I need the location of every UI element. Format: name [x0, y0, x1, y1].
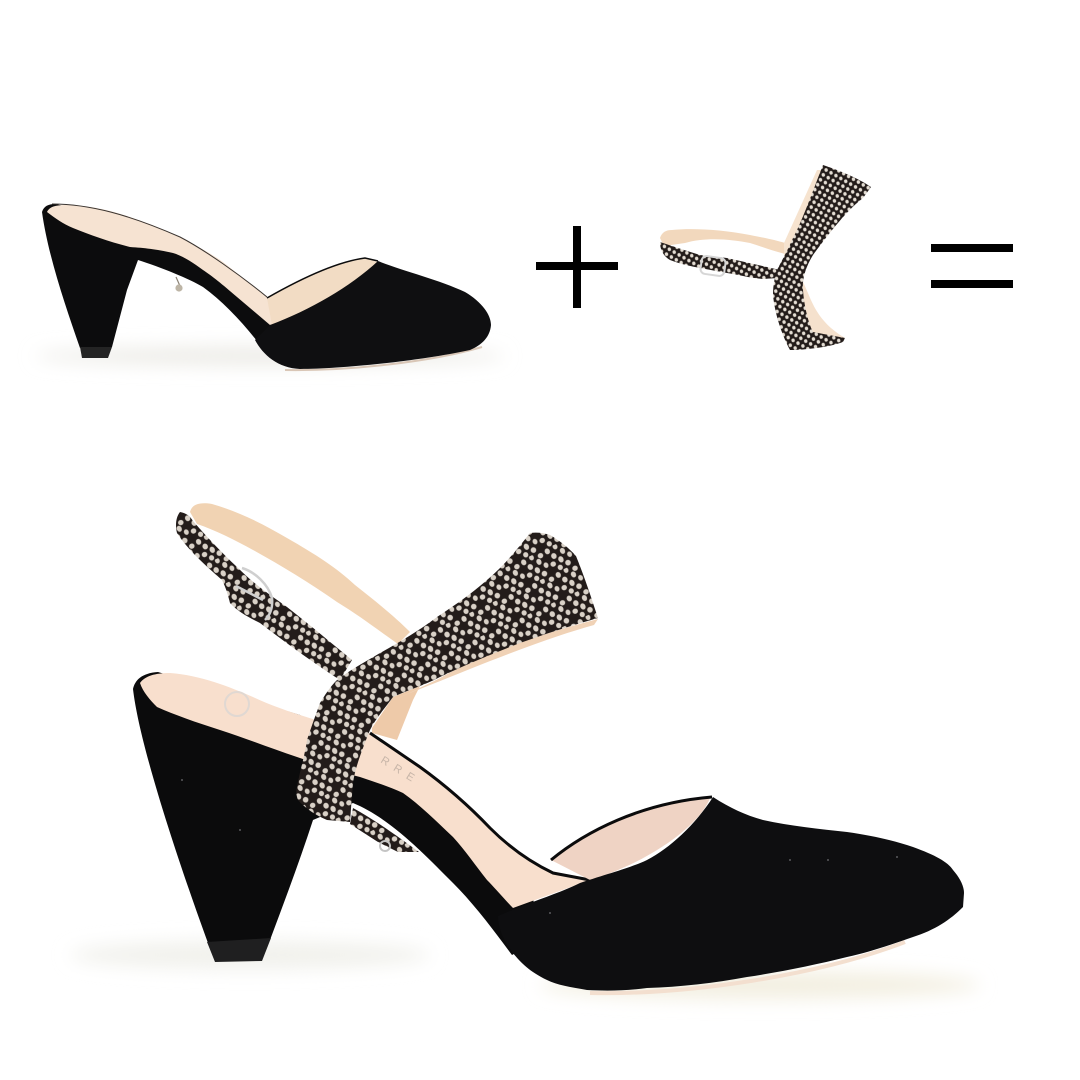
charm: [380, 841, 390, 851]
interior toe opening: [551, 798, 710, 880]
lining under front strap: [372, 686, 420, 740]
ground shadow: [70, 941, 430, 969]
sole: [590, 942, 905, 993]
band lining: [784, 170, 824, 256]
toe shadow: [540, 971, 980, 999]
top mule shoe: [35, 204, 505, 370]
heel and back band: [133, 672, 540, 955]
back speckled strap: [176, 512, 352, 680]
insole logo: [225, 692, 249, 716]
front speckled band: [773, 165, 871, 350]
assembled slingback shoe: [70, 503, 980, 999]
insole brand text: RRE: [378, 754, 422, 788]
heel tip: [207, 938, 271, 962]
ground shadow under mule: [35, 347, 505, 365]
vamp: [498, 797, 964, 991]
suede specks: [181, 779, 898, 914]
mule sole: [285, 347, 482, 370]
front strap lining edge: [393, 619, 598, 700]
buckle: [236, 568, 272, 620]
upper inner topline: [370, 733, 590, 880]
equals sign: [931, 244, 1013, 288]
speckled strip under strap: [350, 808, 419, 852]
mule heel and band: [42, 204, 280, 350]
front speckled strap: [296, 533, 598, 822]
mule interior: [267, 258, 378, 325]
back ankle strap speckled: [660, 242, 780, 279]
back strap lining: [190, 503, 410, 644]
mule top rim line: [52, 204, 267, 297]
plus sign: [536, 226, 618, 308]
insole: [140, 673, 590, 908]
top strap accessory: [660, 165, 871, 350]
buckle: [700, 255, 726, 277]
mule vamp: [255, 261, 491, 369]
back strap lining: [660, 229, 785, 254]
heel tip: [80, 347, 112, 358]
lower cream lining: [803, 282, 845, 338]
interior top edge: [551, 797, 712, 860]
mule insole: [47, 205, 305, 325]
charm: [175, 277, 183, 292]
